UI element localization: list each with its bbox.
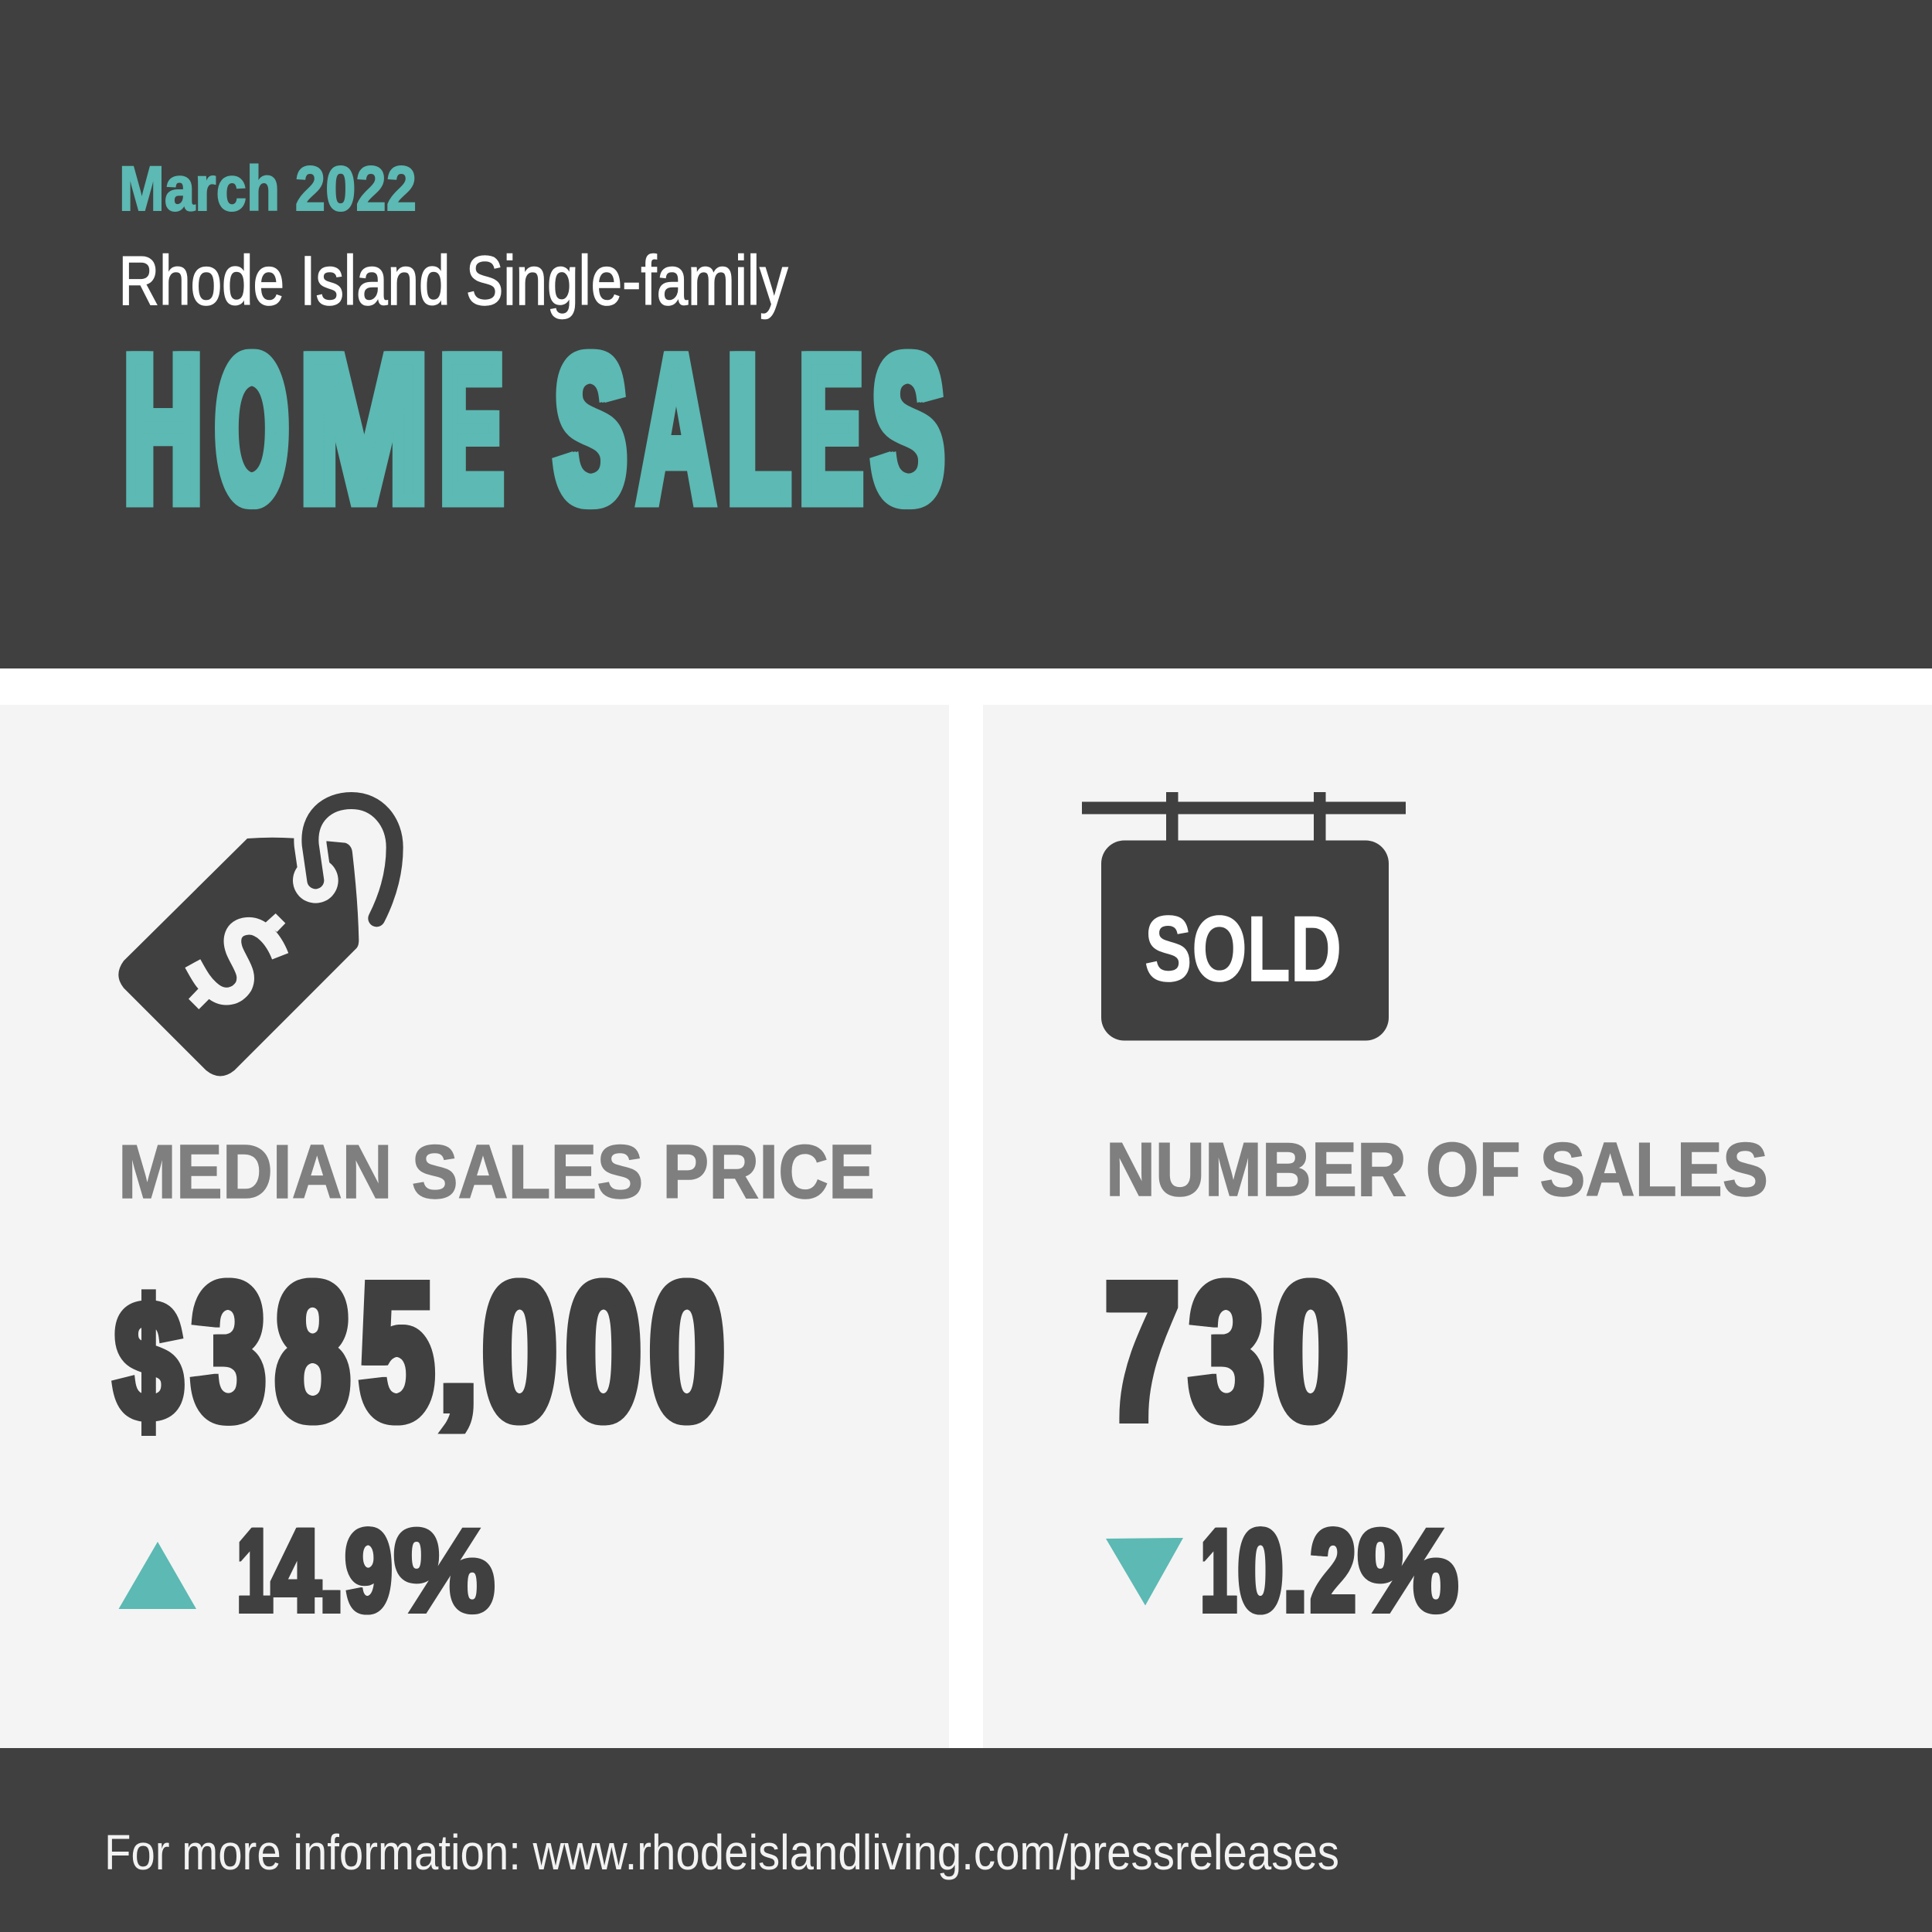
footer panel [0, 1748, 1932, 1932]
main title: E [441, 313, 502, 546]
icon: price tag [118, 801, 395, 1076]
main title: A [638, 313, 715, 546]
main title: M [299, 313, 429, 546]
icon: down arrow [1106, 1538, 1183, 1606]
footer text: For more information: www.rhodeislandliving.com/pressreleases [104, 1825, 1339, 1880]
sales value: 3 [1190, 1243, 1264, 1459]
price value: 3 [192, 1243, 265, 1459]
price value: 0 [566, 1243, 641, 1459]
sign text: SOLD [1145, 897, 1342, 1001]
sales change: 2 [1311, 1505, 1355, 1635]
price value: 8 [276, 1243, 349, 1459]
main title: H [125, 313, 201, 546]
sales value: 0 [1274, 1243, 1348, 1459]
main title: L [729, 313, 789, 546]
panel: median sales price [0, 705, 949, 1748]
price change: 9 [345, 1505, 392, 1635]
price value: 0 [483, 1243, 556, 1459]
price change: 1 [237, 1505, 273, 1635]
date heading: March 2022 [119, 154, 417, 224]
price value: $ [114, 1267, 182, 1454]
panel: number of sales [983, 705, 1932, 1748]
sales change: 1 [1201, 1505, 1236, 1635]
price change: . [320, 1505, 343, 1635]
metric label: NUMBER OF SALES [1106, 1127, 1768, 1212]
metric label: MEDIAN SALES PRICE [118, 1129, 875, 1214]
header panel [0, 0, 1932, 668]
price value: 0 [650, 1243, 724, 1459]
main title: O [216, 313, 287, 546]
sales change: 0 [1238, 1505, 1283, 1635]
price value: , [442, 1290, 474, 1437]
sales value: 7 [1106, 1243, 1179, 1459]
price change: 4 [272, 1505, 320, 1635]
icon: sold sign [1082, 792, 1406, 1040]
main title: E [801, 313, 862, 546]
main title: S [873, 313, 943, 546]
sales change: % [1358, 1505, 1458, 1635]
price value: 5 [360, 1243, 434, 1459]
main title: S [556, 313, 625, 546]
sales change: . [1284, 1505, 1307, 1635]
subtitle: Rhode Island Single-family [119, 243, 788, 320]
icon: up arrow [119, 1542, 196, 1609]
price change: % [394, 1505, 495, 1635]
